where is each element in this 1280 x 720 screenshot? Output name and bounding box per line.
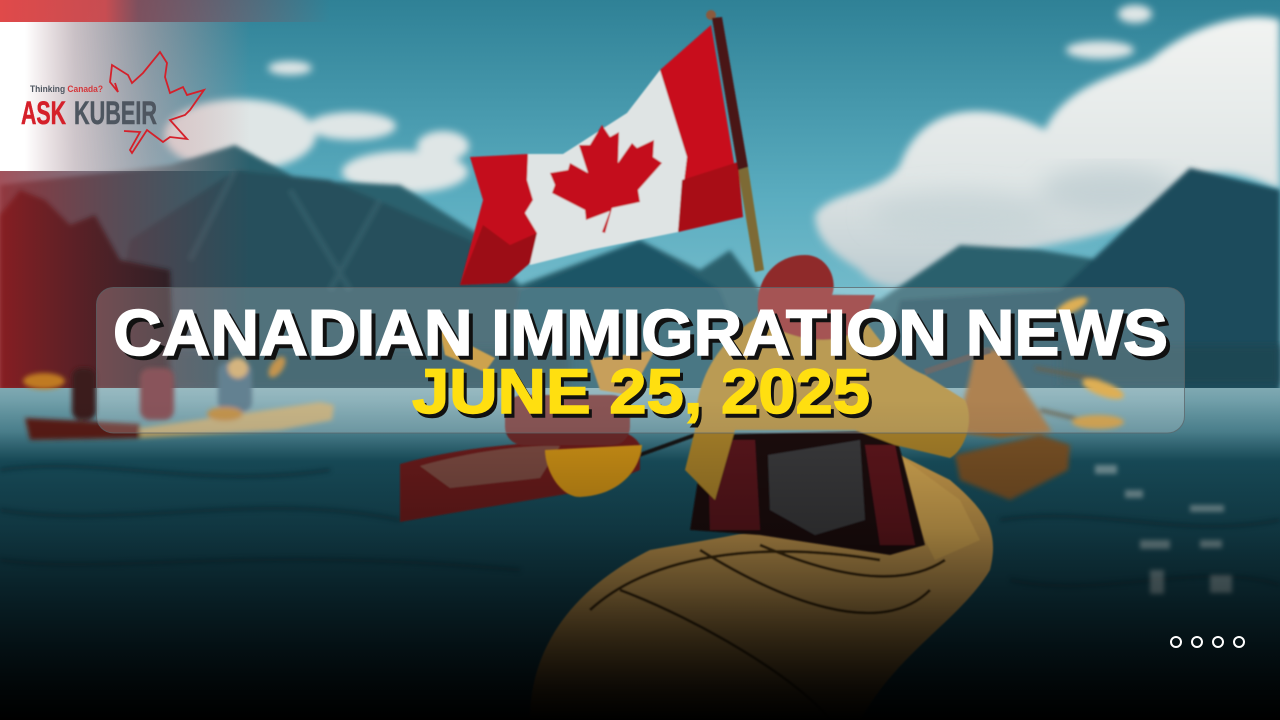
background kayakers left <box>23 354 334 440</box>
arm paddle shaft <box>925 350 990 372</box>
forest on the left <box>0 190 175 390</box>
kayak: left <box>25 402 334 440</box>
cloud: right bank <box>815 17 1280 288</box>
cloud shading <box>870 166 1180 239</box>
flag white band <box>525 70 687 265</box>
date: june 25, 2025: JUNE 25, 2025 <box>412 357 870 427</box>
flag hoist <box>712 17 748 170</box>
flag pole <box>738 167 764 272</box>
logo: tagline: Thinking Canada? <box>30 84 103 95</box>
red tint top strip <box>0 0 330 22</box>
logo: wordmark: ASK <box>21 95 66 131</box>
yellow jacket <box>685 300 969 500</box>
logo band <box>0 22 250 171</box>
flag left red band <box>460 154 537 285</box>
Canadian flag <box>460 10 764 285</box>
title: canadian immigration news: CANADIAN IMMIGRATION NEWS <box>113 296 1168 369</box>
hat <box>758 255 875 340</box>
far shoreline <box>170 345 1280 388</box>
red kayak centre <box>400 395 640 522</box>
kayaker <box>685 255 990 555</box>
title: canadian immigration news: CANADIAN IMMIGRATION NEWS <box>117 300 1172 373</box>
date: june 25, 2025: JUNE 25, 2025 <box>415 361 873 431</box>
clouds <box>164 5 1280 288</box>
bottom vignette <box>0 400 1280 720</box>
logo <box>21 52 204 153</box>
water sparkles <box>1095 465 1232 594</box>
water <box>0 388 1280 720</box>
logo: KUBEIR <box>74 95 157 131</box>
life vest <box>690 430 925 555</box>
background kayak right <box>955 293 1126 500</box>
mountains: background <box>0 145 1280 400</box>
logo: maple leaf outline <box>110 52 204 153</box>
flag right red band <box>660 25 743 232</box>
water ripples <box>0 466 1280 586</box>
sky <box>0 0 1280 400</box>
maple leaf <box>550 125 662 233</box>
translucent title panel <box>96 288 1184 433</box>
main kayak <box>530 445 993 720</box>
yellow paddle <box>440 330 695 497</box>
red tint over the hillside <box>0 22 250 390</box>
pagination dots <box>1171 637 1244 647</box>
